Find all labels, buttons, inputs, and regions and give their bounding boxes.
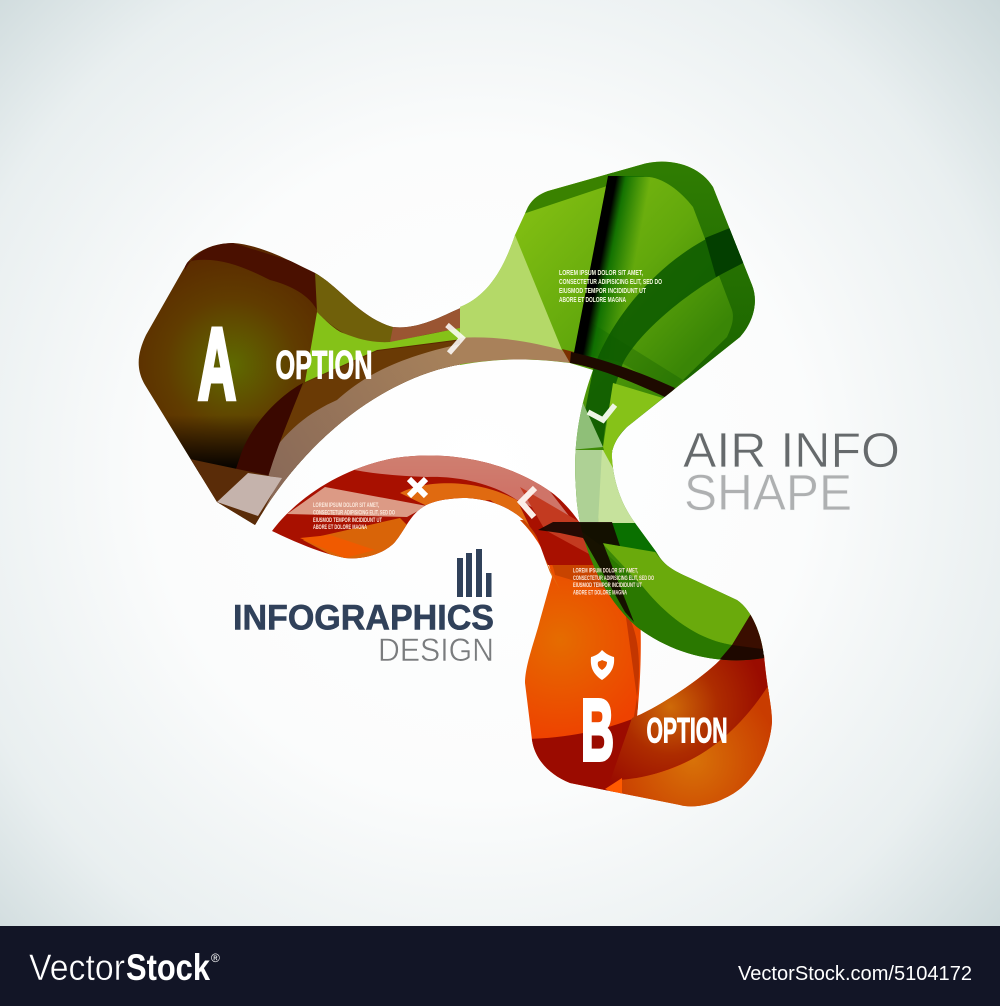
footer logo xyxy=(29,947,220,988)
subheading: design: DESIGN xyxy=(378,632,494,668)
panel: option A brown shape xyxy=(138,243,470,525)
option B letter: B xyxy=(581,682,614,779)
icon: left chevron xyxy=(521,488,535,517)
text block: orange lorem: ABORE ET DOLORE MAGNA xyxy=(573,590,627,596)
title: air info: AIR INFO xyxy=(683,424,900,478)
icon: cross xyxy=(409,479,426,496)
footer logo: Stock xyxy=(126,947,210,988)
footer logo: ® xyxy=(211,951,220,965)
panel: option B orange shape xyxy=(520,520,772,806)
footer logo: Vector xyxy=(29,947,125,988)
option A label: OPTION xyxy=(276,344,372,388)
icon: bar chart xyxy=(457,549,492,597)
footer url: VectorStock.com/5104172 xyxy=(738,963,972,985)
text block: red lorem: EIUSMOD TEMPOR INCIDIDUNT UT xyxy=(313,518,382,524)
text block: green lorem: CONSECTETUR ADIPISICING ELIT, SED DO xyxy=(559,277,662,286)
black crossing band over ribbons xyxy=(538,522,634,622)
option A letter: A xyxy=(198,309,236,421)
icon: check mark xyxy=(588,405,615,420)
text block: red lorem: LOREM IPSUM DOLOR SIT AMET, xyxy=(313,503,379,509)
text block: green lorem: EIUSMOD TEMPOR INCIDIDUNT UT xyxy=(559,286,646,295)
text block: orange lorem xyxy=(573,568,654,596)
text block: red lorem: ABORE ET DOLORE MAGNA xyxy=(313,525,367,531)
text block: red lorem xyxy=(313,503,395,531)
text block: orange lorem: LOREM IPSUM DOLOR SIT AMET, xyxy=(573,568,638,574)
option B label: OPTION xyxy=(646,712,728,750)
text block: green lorem: ABORE ET DOLORE MAGNA xyxy=(559,295,626,304)
icon: shield xyxy=(591,650,614,680)
footer bar xyxy=(0,926,1000,1006)
text block: green lorem: LOREM IPSUM DOLOR SIT AMET, xyxy=(559,268,643,277)
text block: orange lorem: CONSECTETUR ADIPISICING ELIT, SED DO xyxy=(573,576,654,582)
subtitle: shape: SHAPE xyxy=(684,464,852,521)
text block: green lorem xyxy=(559,268,662,304)
icon: right chevron xyxy=(447,325,462,353)
text block: red lorem: CONSECTETUR ADIPISICING ELIT, SED DO xyxy=(313,510,395,516)
text block: orange lorem: EIUSMOD TEMPOR INCIDIDUNT UT xyxy=(573,583,642,589)
heading: infographics: INFOGRAPHICS xyxy=(233,598,494,638)
panel: green shape and ribbon xyxy=(460,162,764,660)
panel: red arch ribbon xyxy=(272,456,594,587)
